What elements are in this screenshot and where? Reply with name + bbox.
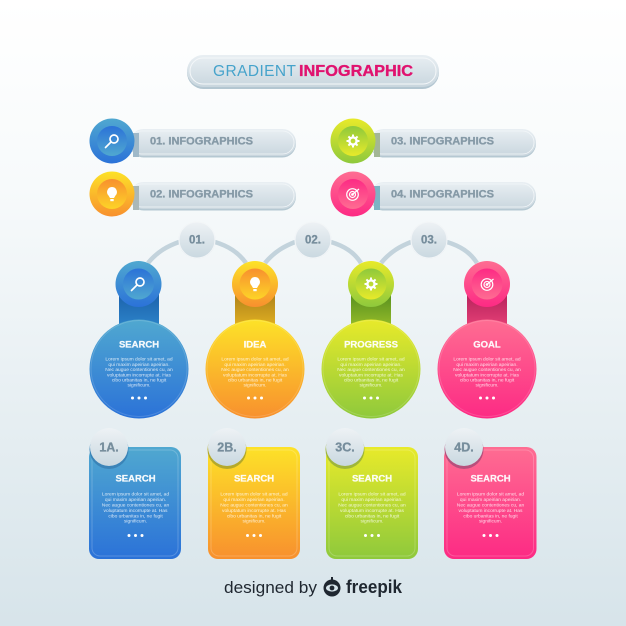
footer credit: designed by xyxy=(224,579,318,597)
body text: significum. xyxy=(359,382,383,388)
body text: Nec augue contentiones cu, an xyxy=(220,502,288,508)
icon: gear xyxy=(364,278,378,290)
panel: card 1A xyxy=(89,428,181,559)
body text: Nec augue contentiones cu, an xyxy=(221,367,289,373)
panel: card 1A: SEARCH xyxy=(115,474,156,484)
panel: card 3C: SEARCH xyxy=(352,474,392,484)
footer credit: freepik xyxy=(346,577,403,597)
icon: target xyxy=(347,189,359,200)
icon: magnifier xyxy=(106,135,118,148)
body text: Lorem ipsum dolor sit amet, ad xyxy=(453,356,521,362)
body text: Lorem ipsum dolor sit amet, ad xyxy=(220,492,288,498)
legend item 01: 01. INFOGRAPHICS xyxy=(150,136,253,148)
panel: goal circle xyxy=(438,261,536,418)
body text: significum. xyxy=(475,382,499,388)
legend item 01 xyxy=(90,118,296,164)
panel: card 4D: 4D. xyxy=(454,440,474,454)
legend item 04 xyxy=(330,172,536,216)
body text: Nec augue contentiones cu, an xyxy=(105,367,173,373)
step node 01: 01. xyxy=(189,234,205,246)
body text: significum. xyxy=(124,518,147,524)
body text: Nec augue contentiones cu, an xyxy=(457,502,524,508)
body text: significum. xyxy=(127,382,151,388)
body text: qui maxim apeirian apeirian. xyxy=(108,362,170,368)
panel: progress circle: PROGRESS xyxy=(344,340,398,350)
panel: card 2B: 2B. xyxy=(217,440,237,454)
body text: Lorem ipsum dolor sit amet, ad xyxy=(338,492,406,498)
body text: voluptatum incorrupte at. Has xyxy=(339,372,403,378)
icon: light bulb xyxy=(107,187,117,201)
body text: qui maxim apeirian apeirian. xyxy=(223,497,285,503)
body text: qui maxim apeirian apeirian. xyxy=(340,362,402,368)
legend item 02 xyxy=(90,172,296,216)
legend item 03: 03. INFOGRAPHICS xyxy=(391,136,494,148)
body text: Lorem ipsum dolor sit amet, ad xyxy=(105,356,173,362)
panel: card 4D xyxy=(444,428,536,559)
body text: significum. xyxy=(479,518,502,524)
timeline arcs xyxy=(148,242,477,263)
body text: qui maxim apeirian apeirian. xyxy=(456,362,518,368)
panel: card 3C xyxy=(326,428,418,559)
panel: card 2B xyxy=(208,428,300,559)
body text: cibo urbanitas in, ne fugit xyxy=(344,378,399,384)
legend item 02: 02. INFOGRAPHICS xyxy=(150,188,253,200)
panel: idea circle: IDEA xyxy=(244,340,266,350)
body text: qui maxim apeirian apeirian. xyxy=(224,362,286,368)
body text: cibo urbanitas in, ne fugit xyxy=(228,378,283,384)
body text: voluptatum incorrupte at. Has xyxy=(222,508,286,514)
panel: goal circle: GOAL xyxy=(473,340,501,350)
body text: voluptatum incorrupte at. Has xyxy=(107,372,171,378)
body text: Lorem ipsum dolor sit amet, ad xyxy=(221,356,289,362)
body text: qui maxim apeirian apeirian. xyxy=(341,497,403,503)
step node 02: 02. xyxy=(305,234,321,246)
panel: card 2B: SEARCH xyxy=(234,474,274,484)
body text: cibo urbanitas in, ne fugit xyxy=(460,378,515,384)
body text: cibo urbanitas in, ne fugit xyxy=(227,514,282,520)
step node 01 xyxy=(178,222,216,258)
body text: Nec augue contentiones cu, an xyxy=(102,502,169,508)
body text: qui maxim apeirian apeirian. xyxy=(105,497,166,503)
step node 03 xyxy=(410,222,448,258)
title text: GRADIENT xyxy=(213,63,297,80)
panel: search circle xyxy=(90,261,188,418)
icon: target xyxy=(481,279,494,290)
icon: light bulb xyxy=(250,277,260,291)
body text: voluptatum incorrupte at. Has xyxy=(223,372,287,378)
body text: cibo urbanitas in, ne fugit xyxy=(463,514,518,520)
panel: idea circle xyxy=(206,261,304,418)
legend item 04: 04. INFOGRAPHICS xyxy=(391,188,494,200)
icon: gear xyxy=(346,134,360,148)
body text: Lorem ipsum dolor sit amet, ad xyxy=(457,492,524,498)
body text: Nec augue contentiones cu, an xyxy=(453,367,521,373)
panel: progress circle xyxy=(322,261,420,418)
body text: voluptatum incorrupte at. Has xyxy=(104,508,168,514)
body text: significum. xyxy=(360,518,384,524)
legend item 03 xyxy=(330,118,536,164)
body text: Nec augue contentiones cu, an xyxy=(338,502,406,508)
body text: voluptatum incorrupte at. Has xyxy=(459,508,523,514)
icon: magnifier xyxy=(132,278,144,290)
body text: Lorem ipsum dolor sit amet, ad xyxy=(337,356,405,362)
panel: card 3C: 3C. xyxy=(335,440,355,454)
body text: voluptatum incorrupte at. Has xyxy=(340,508,404,514)
panel: card 1A: 1A. xyxy=(99,440,119,454)
body text: cibo urbanitas in, ne fugit xyxy=(112,378,167,384)
body text: Lorem ipsum dolor sit amet, ad xyxy=(102,492,169,498)
body text: Nec augue contentiones cu, an xyxy=(337,367,405,373)
body text: qui maxim apeirian apeirian. xyxy=(460,497,521,503)
body text: cibo urbanitas in, ne fugit xyxy=(108,514,163,520)
body text: significum. xyxy=(242,518,266,524)
panel: card 4D: SEARCH xyxy=(470,474,511,484)
footer credit xyxy=(224,577,403,597)
body text: voluptatum incorrupte at. Has xyxy=(455,372,519,378)
step node 02 xyxy=(294,222,332,258)
body text: cibo urbanitas in, ne fugit xyxy=(345,514,400,520)
panel: search circle: SEARCH xyxy=(119,340,159,350)
step node 03: 03. xyxy=(421,234,437,246)
title pill xyxy=(187,55,439,89)
body text: significum. xyxy=(243,382,267,388)
icon: freepik logo xyxy=(324,577,340,596)
title text: INFOGRAPHIC xyxy=(299,63,413,80)
